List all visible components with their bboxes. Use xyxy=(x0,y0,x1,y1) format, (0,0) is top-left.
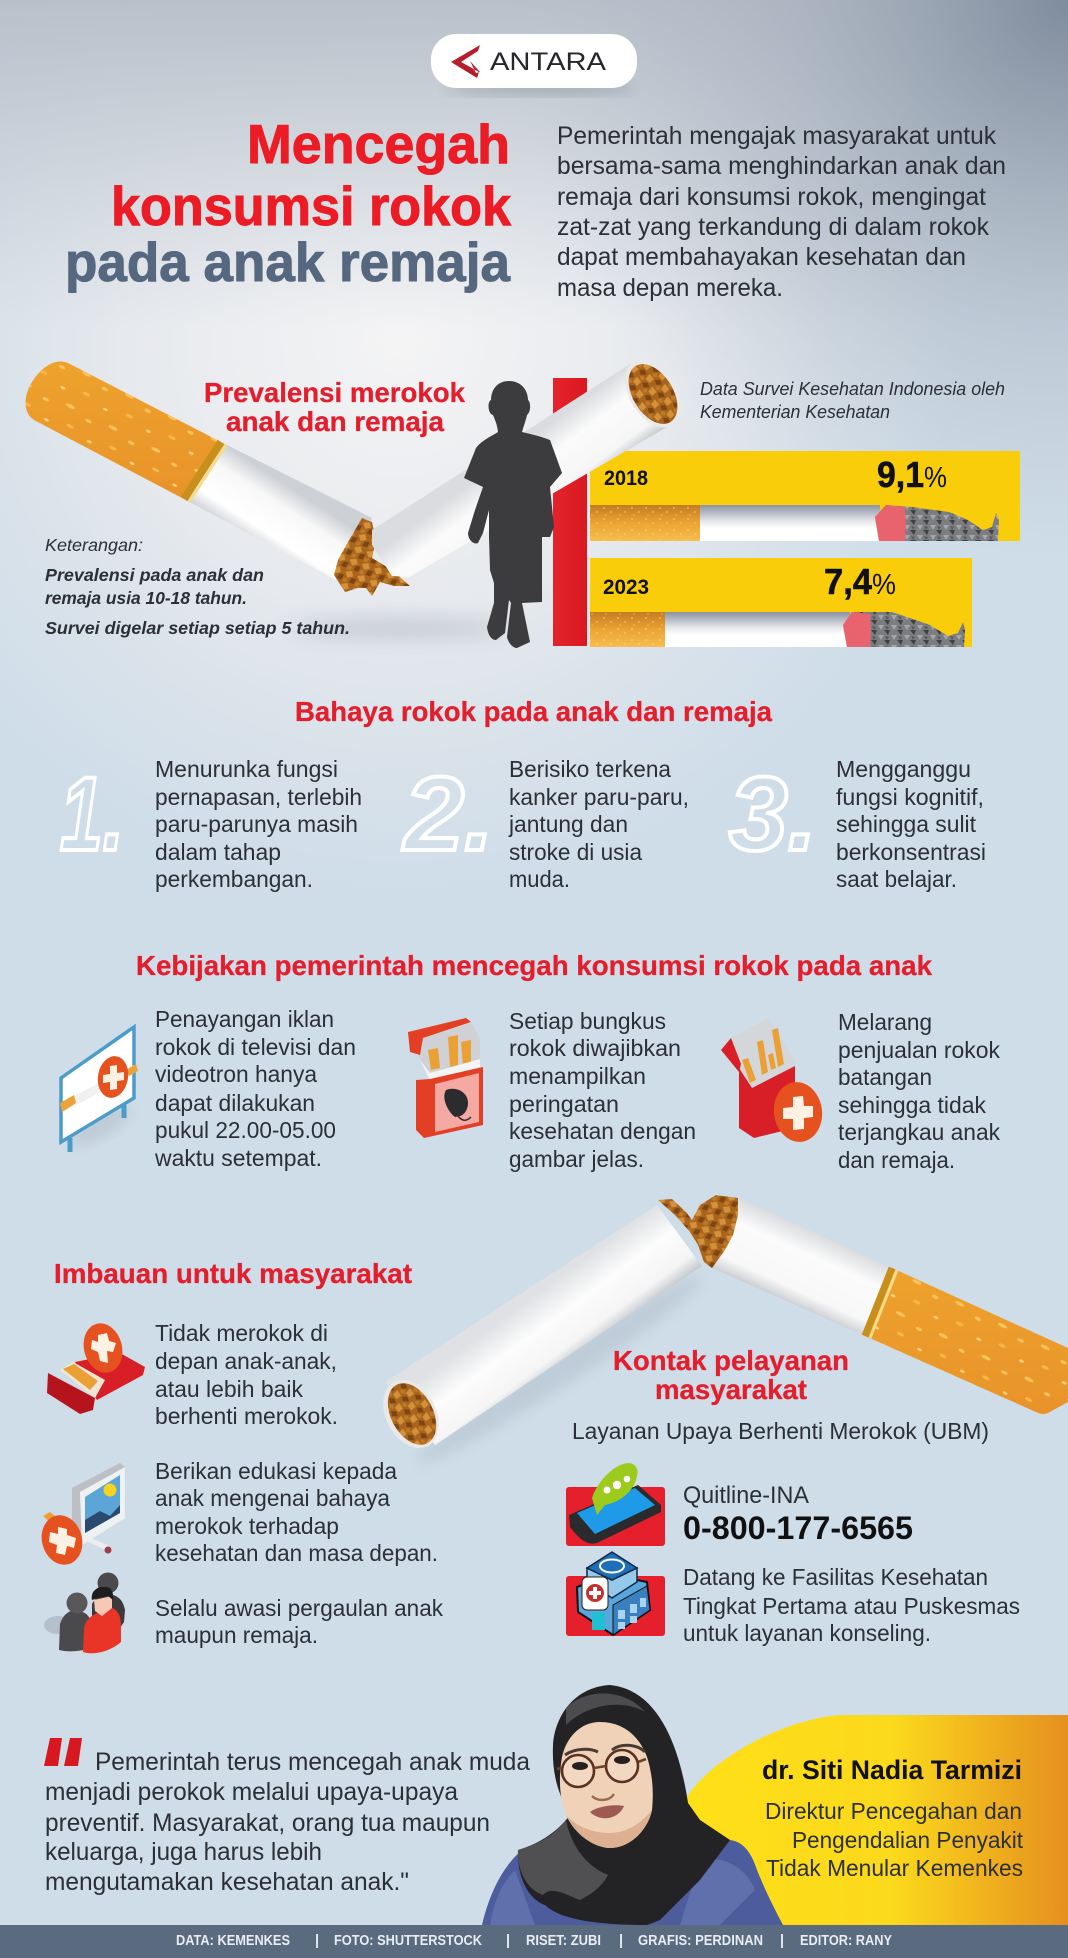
heading: imbauan: Imbauan untuk masyarakat xyxy=(54,1258,412,1289)
panel: imbauan 2 xyxy=(36,1458,438,1569)
panel: bahaya 2: stroke di usia xyxy=(509,839,643,865)
panel: bahaya 3: fungsi kognitif, xyxy=(836,784,984,810)
panel: kebijakan iklan xyxy=(60,1006,356,1171)
panel: bahaya 2: jantung dan xyxy=(508,811,628,837)
quote: menjadi perokok melalui upaya-upaya xyxy=(45,1778,458,1806)
intro paragraph: masa depan mereka. xyxy=(557,274,783,302)
intro paragraph: dapat membahayakan kesehatan dan xyxy=(557,243,966,271)
speaker name and role: dr. Siti Nadia Tarmizi xyxy=(762,1755,1022,1785)
panel: bahaya 2: muda. xyxy=(509,866,570,892)
keterangan note: remaja usia 10-18 tahun. xyxy=(45,588,247,608)
heading: kontak xyxy=(613,1345,849,1405)
title: pada anak remaja xyxy=(65,231,510,293)
panel: kebijakan batangan: batangan xyxy=(838,1064,932,1090)
speaker name and role: Tidak Menular Kemenkes xyxy=(766,1855,1023,1881)
illustration: dr. Siti Nadia portrait xyxy=(482,1685,783,1925)
panel: kebijakan peringatan: peringatan xyxy=(509,1091,619,1117)
panel: kebijakan batangan: penjualan rokok xyxy=(838,1037,1000,1063)
panel: imbauan 3: Selalu awasi pergaulan anak xyxy=(155,1595,443,1621)
panel: kebijakan batangan: terjangkau anak xyxy=(838,1119,1000,1145)
intro paragraph: bersama-sama menghindarkan anak dan xyxy=(557,152,1006,180)
icon: red pack with cross xyxy=(47,1319,145,1414)
icon: billboard xyxy=(60,1027,138,1152)
bar chart: 2018: 9,1 xyxy=(877,454,924,495)
logo: ANTARA: ANTARA xyxy=(490,48,606,76)
panel: imbauan 3: maupun remaja. xyxy=(155,1622,318,1648)
panel: bahaya 1: perkembangan. xyxy=(155,866,313,892)
panel: bahaya 1: dalam tahap xyxy=(155,839,281,865)
panel: imbauan 3 xyxy=(44,1572,443,1653)
quote: preventif. Masyarakat, orang tua maupun xyxy=(45,1809,490,1837)
title: Mencegah xyxy=(247,113,510,175)
keterangan note: Keterangan: xyxy=(45,535,143,555)
panel: imbauan 1 xyxy=(47,1319,338,1429)
speaker name and role: Direktur Pencegahan dan xyxy=(765,1798,1022,1824)
icon: hospital building xyxy=(566,1552,665,1636)
bar chart: 2023: 2023 xyxy=(603,576,649,599)
panel: kebijakan iklan: waktu setempat. xyxy=(154,1145,322,1171)
quote: Pemerintah terus mencegah anak muda xyxy=(95,1748,530,1776)
logo: ANTARA xyxy=(431,34,637,94)
icon: picture frame and cigarette xyxy=(36,1463,125,1569)
heading: kebijakan: Kebijakan pemerintah mencegah konsumsi rokok pada anak xyxy=(136,950,932,981)
footer credits: | xyxy=(315,1933,319,1949)
panel: bahaya 2: 2. xyxy=(402,756,494,873)
panel: kebijakan iklan: Penayangan iklan xyxy=(155,1006,334,1032)
icon: red pack with medical cross xyxy=(721,1018,826,1145)
panel: kebijakan iklan: rokok di televisi dan xyxy=(155,1034,356,1060)
footer credits: | xyxy=(619,1933,623,1949)
shadow under broken cigarette xyxy=(290,619,510,637)
footer credits: EDITOR: RANY xyxy=(800,1933,892,1949)
panel: kontak pelayanan: 0-800-177-6565 xyxy=(683,1510,913,1546)
bar chart: 2018: % xyxy=(924,462,947,494)
panel: kebijakan peringatan: rokok diwajibkan xyxy=(509,1035,681,1061)
panel: kontak pelayanan: Datang ke Fasilitas Kesehatan xyxy=(683,1564,988,1590)
speaker name and role: Pengendalian Penyakit xyxy=(792,1827,1023,1853)
footer credits: RISET: ZUBI xyxy=(526,1933,601,1949)
panel: imbauan 2: kesehatan dan masa depan. xyxy=(155,1540,438,1566)
panel: kebijakan peringatan: gambar jelas. xyxy=(509,1146,644,1172)
panel: kontak pelayanan: Layanan Upaya Berhenti Merokok (UBM) xyxy=(572,1418,989,1444)
intro paragraph: remaja dari konsumsi rokok, mengingat xyxy=(557,183,986,211)
icon: cigarette pack with skull xyxy=(408,1018,483,1138)
cigarette: left broken half xyxy=(26,362,410,596)
heading: bahaya: Bahaya rokok pada anak dan remaja xyxy=(295,696,772,727)
panel: imbauan 1: Tidak merokok di xyxy=(155,1320,328,1346)
footer credits: GRAFIS: PERDINAN xyxy=(638,1933,763,1949)
panel: kebijakan peringatan: kesehatan dengan xyxy=(509,1118,696,1144)
keterangan note: Survei digelar setiap setiap 5 tahun. xyxy=(45,618,350,638)
panel: imbauan 2: Berikan edukasi kepada xyxy=(155,1458,398,1484)
red vertical bar xyxy=(553,378,587,646)
source note: Kementerian Kesehatan xyxy=(700,401,890,422)
panel: kebijakan iklan: pukul 22.00-05.00 xyxy=(155,1117,336,1143)
panel: bahaya 1 xyxy=(60,756,362,892)
intro paragraph xyxy=(557,122,1006,302)
panel: bahaya 1: paru-parunya masih xyxy=(155,811,358,837)
cigarette: right broken half xyxy=(372,350,692,577)
panel: bahaya 2: kanker paru-paru, xyxy=(509,784,689,810)
quote: mengutamakan kesehatan anak." xyxy=(45,1868,409,1896)
heading: prevalensi: anak dan remaja xyxy=(226,406,444,437)
panel: kebijakan iklan: videotron hanya xyxy=(155,1061,318,1087)
panel: bahaya 1: Menurunka fungsi xyxy=(155,756,338,782)
panel: imbauan 2: merokok terhadap xyxy=(155,1513,339,1539)
keterangan note: Prevalensi pada anak dan xyxy=(45,565,264,585)
bar chart: 2023: 7,4 xyxy=(824,561,872,602)
bar chart: 2023 xyxy=(590,558,972,647)
quote: keluarga, juga harus lebih xyxy=(45,1838,322,1866)
panel: bahaya 2: Berisiko terkena xyxy=(509,756,672,782)
panel: bahaya 1: 1. xyxy=(60,756,124,873)
title: konsumsi rokok xyxy=(111,175,511,237)
panel: bahaya 3: Mengganggu xyxy=(836,756,971,782)
footer credits: FOTO: SHUTTERSTOCK xyxy=(334,1933,482,1949)
panel: imbauan 1: depan anak-anak, xyxy=(155,1348,337,1374)
panel: bahaya 3 xyxy=(729,756,986,892)
bar chart: 2018: 2018 xyxy=(604,467,648,490)
panel: kebijakan peringatan xyxy=(408,1008,696,1172)
panel: kebijakan batangan xyxy=(721,1009,1000,1173)
panel: bahaya 3: berkonsentrasi xyxy=(836,839,986,865)
panel: imbauan 1: berhenti merokok. xyxy=(155,1403,338,1429)
source note: Data Survei Kesehatan Indonesia oleh xyxy=(700,378,1005,399)
heading: prevalensi: Prevalensi merokok xyxy=(204,377,465,408)
bar chart: 2023: % xyxy=(872,569,896,601)
keterangan note xyxy=(45,535,350,638)
panel: bahaya 3: sehingga sulit xyxy=(836,811,976,837)
footer credits: | xyxy=(780,1933,784,1949)
panel: yellow speaker card xyxy=(680,1715,1068,1925)
icon: child silhouette xyxy=(464,381,562,648)
panel: kontak pelayanan: Tingkat Pertama atau Puskesmas xyxy=(683,1593,1020,1619)
panel: bahaya 2 xyxy=(402,756,689,892)
panel: kontak pelayanan: untuk layanan konseling. xyxy=(683,1620,931,1646)
icon: phone with chat bubble xyxy=(566,1463,665,1546)
panel: kebijakan batangan: Melarang xyxy=(838,1009,932,1035)
cigarette: lower broken cigarette xyxy=(372,1195,1068,1476)
panel: kebijakan batangan: dan remaja. xyxy=(838,1147,955,1173)
speaker name and role xyxy=(762,1755,1023,1881)
panel: bahaya 1: pernapasan, terlebih xyxy=(155,784,362,810)
source note xyxy=(700,378,1005,422)
intro paragraph: Pemerintah mengajak masyarakat untuk xyxy=(557,122,996,150)
intro paragraph: zat-zat yang terkandung di dalam rokok xyxy=(557,213,989,241)
panel: kontak pelayanan: Quitline-INA xyxy=(683,1482,809,1509)
title xyxy=(65,113,511,293)
panel: kebijakan iklan: dapat dilakukan xyxy=(155,1090,315,1116)
panel: kontak pelayanan xyxy=(566,1345,1020,1646)
quote xyxy=(44,1738,530,1896)
panel: kebijakan batangan: sehingga tidak xyxy=(838,1092,986,1118)
footer credits xyxy=(0,1925,1068,1958)
panel: kebijakan peringatan: Setiap bungkus xyxy=(509,1008,666,1034)
heading: kontak: masyarakat xyxy=(655,1374,807,1405)
panel: kebijakan peringatan: menampilkan xyxy=(509,1063,646,1089)
heading: prevalensi xyxy=(204,377,465,437)
panel: bahaya 3: 3. xyxy=(729,756,817,873)
bar chart: 2018 xyxy=(590,451,1020,541)
footer credits: | xyxy=(506,1933,510,1949)
panel: imbauan 1: atau lebih baik xyxy=(155,1376,303,1402)
panel: imbauan 2: anak mengenai bahaya xyxy=(155,1485,391,1511)
icon: quote mark xyxy=(44,1738,82,1766)
heading: kontak: Kontak pelayanan xyxy=(613,1345,849,1376)
panel: bahaya 3: saat belajar. xyxy=(836,866,957,892)
icon: people group xyxy=(44,1572,125,1653)
footer credits: DATA: KEMENKES xyxy=(176,1933,290,1949)
